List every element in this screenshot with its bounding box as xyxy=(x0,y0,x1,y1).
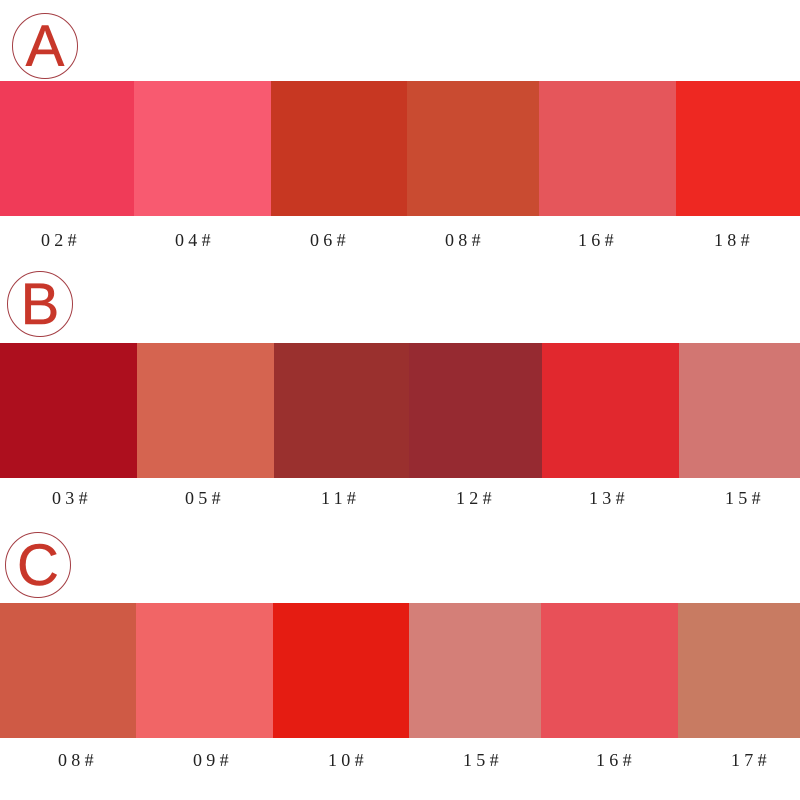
labels row C: 17# xyxy=(731,750,771,770)
badge A: A xyxy=(26,14,64,79)
labels row B: 12# xyxy=(456,488,496,508)
labels row A: 08# xyxy=(445,230,485,250)
labels row A: 16# xyxy=(578,230,618,250)
badge A xyxy=(12,13,78,79)
labels row B xyxy=(52,488,765,508)
labels row A xyxy=(41,230,754,250)
labels row C: 15# xyxy=(463,750,503,770)
labels row A: 02# xyxy=(41,230,81,250)
swatch row C xyxy=(0,603,800,738)
badge C: C xyxy=(17,533,59,598)
badge C xyxy=(5,532,71,598)
labels row C: 08# xyxy=(58,750,98,770)
labels row A: 06# xyxy=(310,230,350,250)
swatch row B xyxy=(0,343,800,478)
badge B: B xyxy=(21,272,59,337)
labels row C xyxy=(58,750,771,770)
labels row B: 03# xyxy=(52,488,92,508)
labels row C: 09# xyxy=(193,750,233,770)
swatch row A xyxy=(0,81,800,216)
labels row B: 13# xyxy=(589,488,629,508)
labels row C: 16# xyxy=(596,750,636,770)
badge B xyxy=(7,271,73,337)
labels row A: 04# xyxy=(175,230,215,250)
labels row B: 05# xyxy=(185,488,225,508)
labels row B: 15# xyxy=(725,488,765,508)
labels row A: 18# xyxy=(714,230,754,250)
labels row B: 11# xyxy=(321,488,360,508)
labels row C: 10# xyxy=(328,750,368,770)
